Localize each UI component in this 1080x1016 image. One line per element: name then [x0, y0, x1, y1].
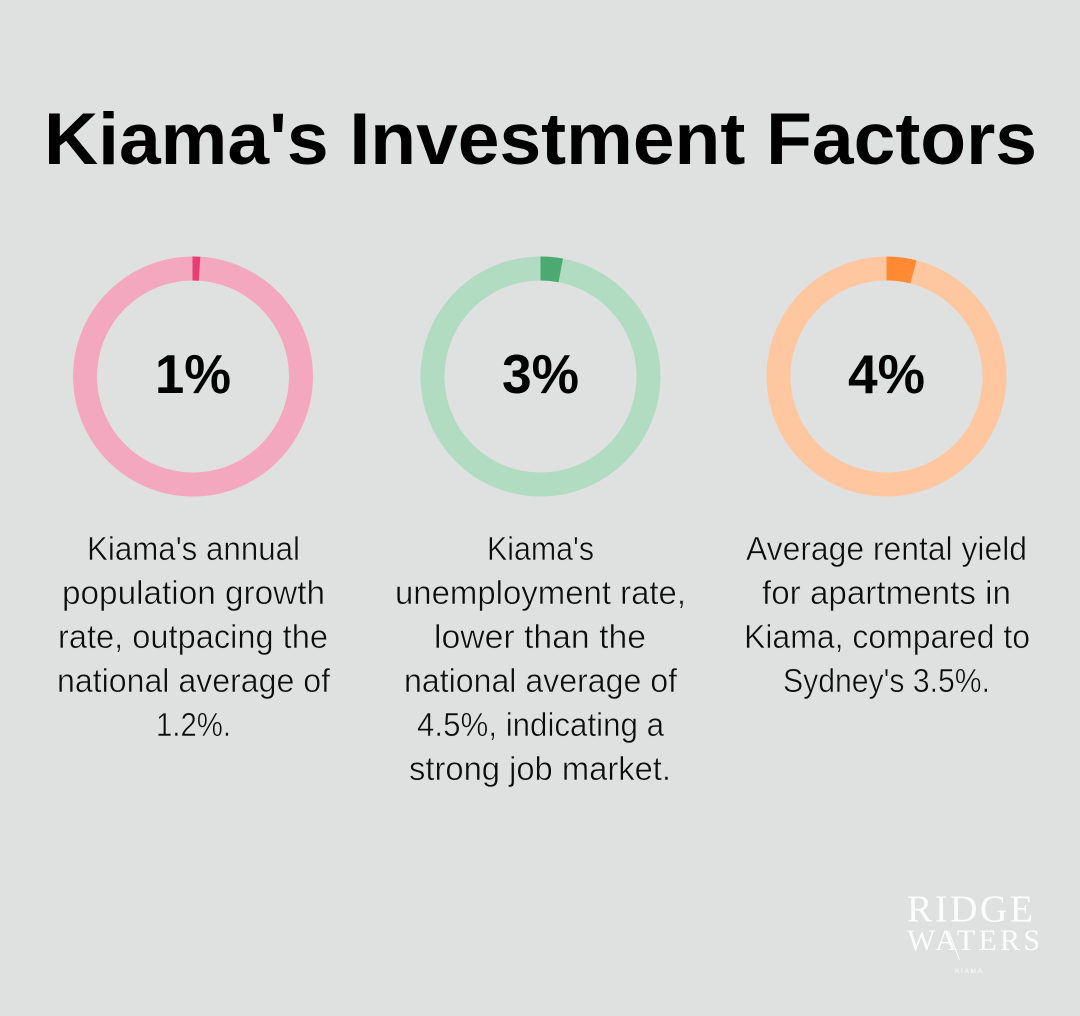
donut chart: 1% — [85, 256, 301, 484]
description: population growth: national average of — [57, 662, 331, 699]
logo: Ridge Waters Kiama: KIAMA — [955, 968, 983, 975]
value: 4%: 4% — [848, 343, 925, 405]
description: population growth: population growth — [62, 574, 325, 611]
donut chart: 3% — [432, 256, 648, 484]
description: rental yield: Sydney's 3.5%. — [783, 662, 990, 699]
panel: unemployment rate — [395, 256, 686, 787]
logo: Ridge Waters Kiama: RIDGE — [907, 888, 1033, 930]
title: Kiama's Investment Factors — [44, 99, 1037, 180]
logo: Ridge Waters Kiama: WATERS — [907, 924, 1040, 957]
description: unemployment rate: Kiama's — [487, 530, 594, 567]
donut chart: 4% — [778, 256, 994, 484]
logo: Ridge Waters Kiama — [907, 888, 1040, 975]
description: population growth: rate, outpacing the — [58, 618, 328, 655]
value: 1%: 1% — [155, 343, 231, 405]
panel: population growth — [57, 256, 331, 743]
description: population growth: Kiama's annual — [87, 530, 300, 567]
description: rental yield: Average rental yield — [746, 530, 1027, 567]
description: rental yield — [744, 530, 1030, 699]
description: unemployment rate: strong job market. — [409, 750, 671, 787]
value: 3%: 3% — [502, 343, 579, 405]
description: rental yield: Kiama, compared to — [744, 618, 1030, 655]
description: unemployment rate — [395, 530, 686, 787]
description: unemployment rate: national average of — [404, 662, 678, 699]
panel: rental yield — [744, 256, 1030, 699]
description: unemployment rate: lower than the — [434, 618, 646, 655]
description: rental yield: for apartments in — [762, 574, 1011, 611]
description: population growth — [57, 530, 331, 743]
description: population growth: 1.2%. — [156, 706, 231, 743]
description: unemployment rate: unemployment rate, — [395, 574, 686, 611]
description: unemployment rate: 4.5%, indicating a — [417, 706, 665, 743]
